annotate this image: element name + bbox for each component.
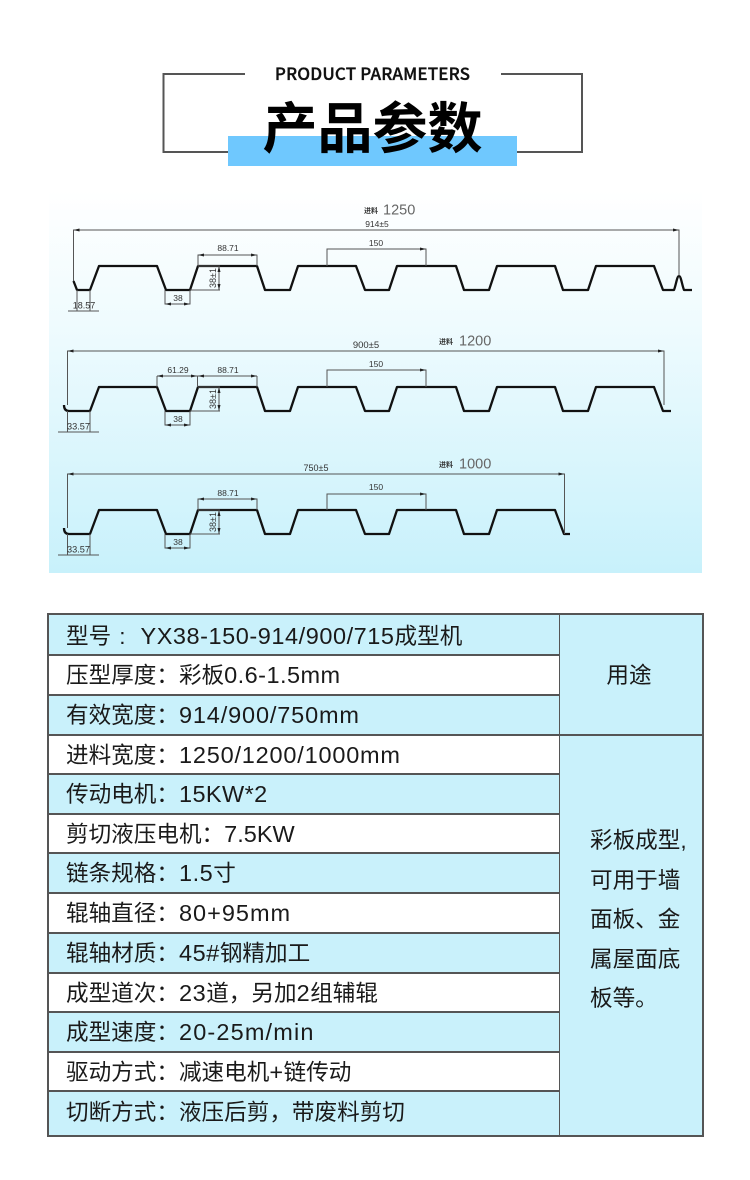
profile drawing 1250: 150 xyxy=(369,238,383,248)
row: drive motor: 传动电机：15KW*2 xyxy=(66,781,268,807)
usage text cell: 板等。 xyxy=(590,986,658,1011)
header highlight band xyxy=(228,136,517,166)
row: chain: 链条规格：1.5寸 xyxy=(66,860,236,886)
profile drawing 1000: 33.57 xyxy=(67,544,90,554)
profile drawing 1250 xyxy=(68,202,692,311)
profile drawing 1200: 1200 xyxy=(459,334,491,350)
row: shaft material: 辊轴材质：45#钢精加工 xyxy=(66,940,310,966)
row: effective width xyxy=(47,694,560,736)
row: feed width: 进料宽度：1250/1200/1000mm xyxy=(66,742,401,768)
row: effective width: 有效宽度：914/900/750mm xyxy=(66,702,360,728)
row: forming speed: 成型速度：20-25m/min xyxy=(66,1019,315,1045)
profile drawing 1250: 38±1 xyxy=(208,268,218,288)
row: forming passes xyxy=(47,972,560,1013)
profile drawing 1250: 88.71 xyxy=(217,243,239,253)
profile drawing 1250: 1250 xyxy=(383,202,415,218)
english subtitle: PRODUCT PARAMETERS xyxy=(275,60,470,85)
usage text cell: 面板、金 xyxy=(590,907,680,932)
profile drawing 1200: 61.29 xyxy=(167,365,189,375)
row: shaft material xyxy=(47,932,560,974)
profile drawing 1000: 1000 xyxy=(459,456,491,472)
row: drive method: 驱动方式：减速电机+链传动 xyxy=(66,1059,351,1085)
usage header cell xyxy=(559,613,704,736)
header frame xyxy=(162,73,583,153)
profile drawing 1200: 900±5 xyxy=(353,340,379,351)
row: cutting method: 切断方式：液压后剪，带废料剪切 xyxy=(66,1100,405,1125)
row: feed width xyxy=(47,734,560,775)
profile drawing 1000: 进料 xyxy=(439,460,453,469)
row: shaft diameter xyxy=(47,892,560,934)
row: drive method xyxy=(47,1051,560,1092)
row: model: 型号 : YX38-150-914/900/715成型机 xyxy=(66,623,462,649)
usage text cell xyxy=(559,734,704,1137)
profile drawing 1200: 33.57 xyxy=(67,422,90,432)
panel: profile drawings xyxy=(49,190,702,573)
row: shear motor: 剪切液压电机：7.5KW xyxy=(66,821,295,847)
profile drawing 1200: 88.71 xyxy=(217,365,239,375)
row: shear motor xyxy=(47,813,560,854)
panel: parameter table xyxy=(47,613,704,1137)
title: 产品参数 xyxy=(262,84,482,164)
usage header cell: 用途 xyxy=(606,663,652,688)
usage text cell: 彩板成型, xyxy=(590,828,687,853)
row: forming passes: 成型道次：23道，另加2组辅辊 xyxy=(66,980,378,1006)
profile drawing 1000: 750±5 xyxy=(304,463,328,473)
row: chain xyxy=(47,852,560,894)
profile drawing 1200 xyxy=(58,334,671,432)
row: drive motor xyxy=(47,773,560,815)
profile drawing 1250: 914±5 xyxy=(365,219,389,229)
profile drawing 1250: 进料 xyxy=(364,206,378,215)
row: shaft diameter: 辊轴直径：80+95mm xyxy=(66,900,291,926)
row: thickness: 压型厚度：彩板0.6-1.5mm xyxy=(66,662,341,688)
profile drawing 1200: 进料 xyxy=(439,337,453,346)
profile drawing 1000: 150 xyxy=(369,482,383,492)
profile drawing 1200: 150 xyxy=(369,359,383,369)
profile drawing 1000: 38 xyxy=(173,537,183,547)
profile drawing 1250: 18.57 xyxy=(73,300,95,310)
usage text cell: 属屋面底 xyxy=(590,946,680,972)
profile drawing 1000: 88.71 xyxy=(217,488,239,498)
profile drawing 1250: 38 xyxy=(173,293,183,303)
row: model xyxy=(47,613,560,657)
row: cutting method xyxy=(47,1090,560,1137)
profile drawing 1000 xyxy=(58,456,570,555)
row: thickness xyxy=(47,654,560,696)
profile drawing 1200: 38±1 xyxy=(208,389,218,409)
row: forming speed xyxy=(47,1011,560,1053)
usage text cell: 可用于墙 xyxy=(590,868,680,892)
profile drawing 1200: 38 xyxy=(173,414,183,424)
profile drawing 1000: 38±1 xyxy=(208,512,218,532)
